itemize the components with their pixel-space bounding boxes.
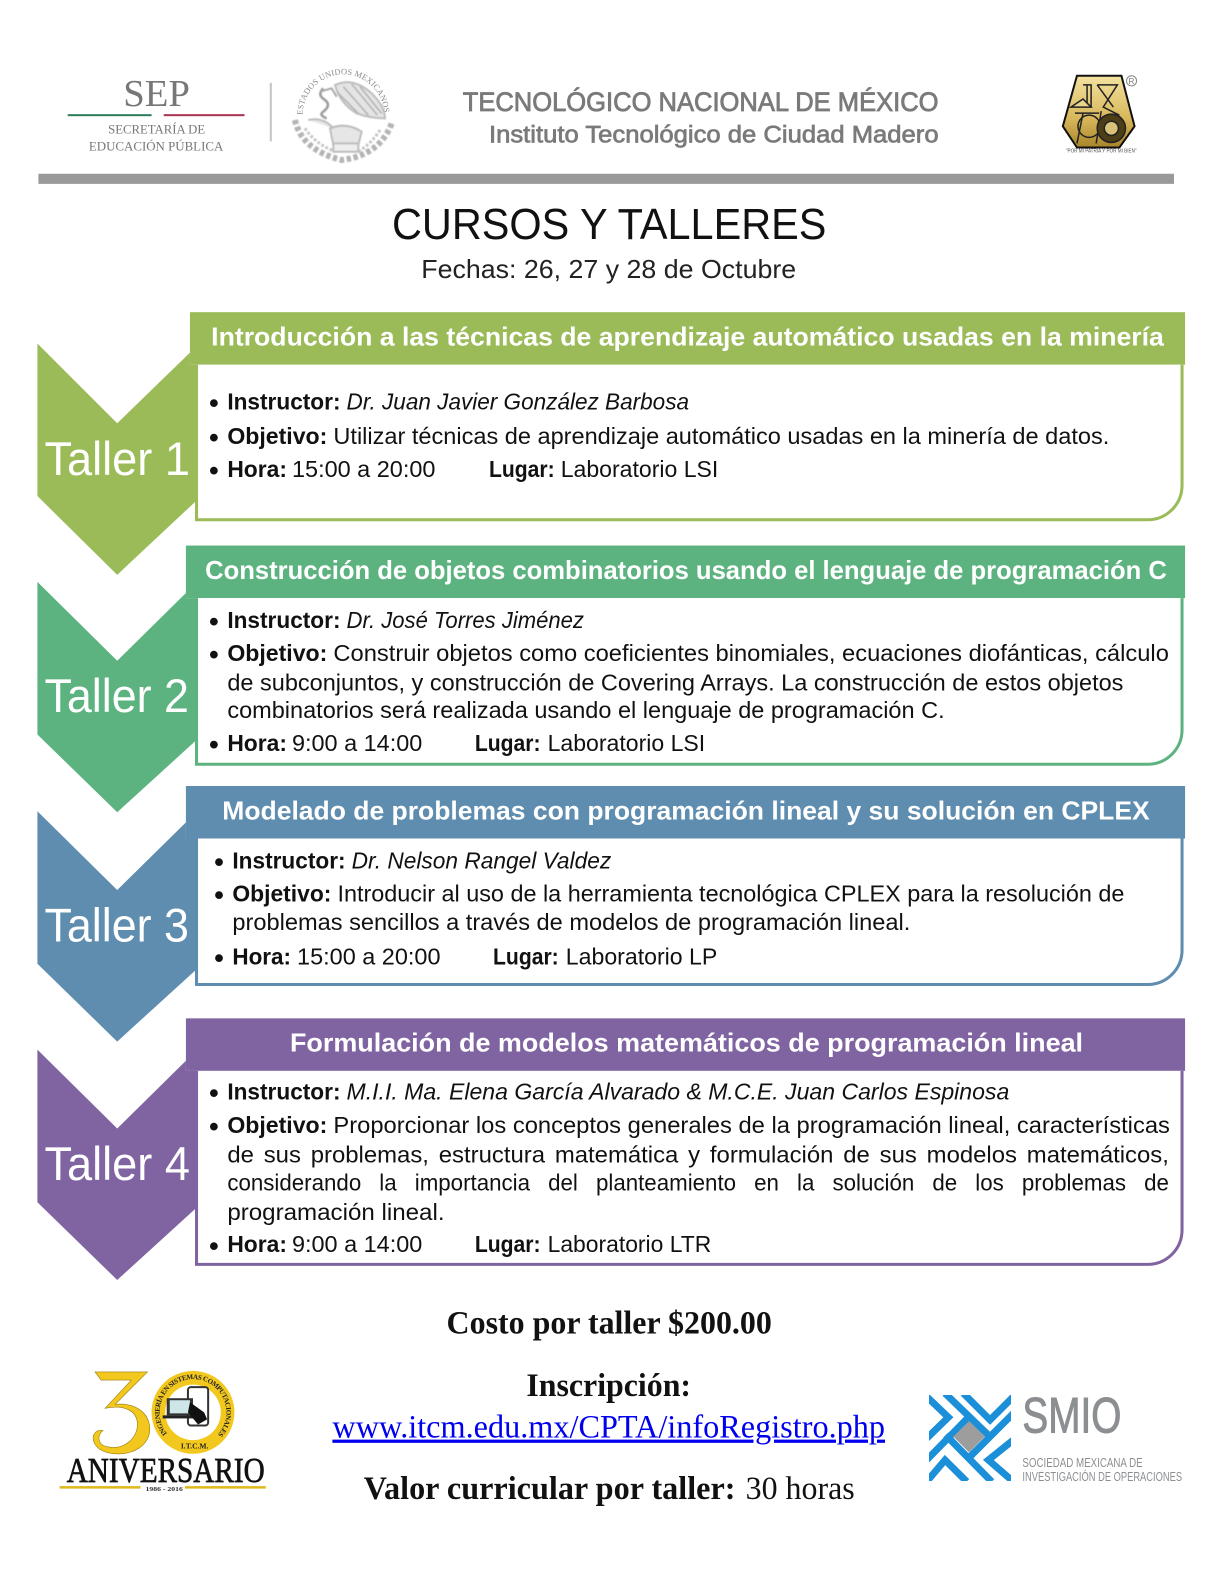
details box: Taller 4: M.I.I. Ma. Elena García Alvarado & M.C.E. Juan Carlos Espinosa — [347, 1079, 1009, 1105]
details box: Taller 4: considerando la importancia del planteamiento en la solución de los problemas de — [227, 1170, 1169, 1196]
curricular value: Valor curricular por taller: — [364, 1470, 736, 1506]
details box: Taller 2: Instructor: — [227, 607, 340, 633]
details box: Taller 1: Instructor: — [227, 389, 340, 415]
logo: national seal: ESTADOS UNIDOS MEXICANOS — [297, 68, 390, 115]
logo: 30 Aniversario — [60, 1370, 266, 1493]
wordmark ANIVERSARIO: ANIVERSARIO — [67, 1450, 265, 1490]
details box: Taller 4: • — [209, 1230, 219, 1261]
details box: Taller 3: Introducir al uso de la herramienta tecnológica CPLEX para la resolución de — [337, 881, 1124, 907]
details box: Taller 3: Dr. Nelson Rangel Valdez — [352, 847, 612, 873]
details box: Taller 1: Hora: — [227, 456, 287, 482]
registration link: www.itcm.edu.mx/CPTA/infoRegistro.php — [332, 1409, 885, 1445]
details box: Taller 3 — [197, 839, 1182, 985]
details box: Taller 4: programación lineal. — [227, 1199, 445, 1225]
anniversary seal ring: INGENIERÍA EN SISTEMAS COMPUTACIONALES — [154, 1374, 231, 1437]
details box: Taller 1: Dr. Juan Javier González Barbosa — [347, 389, 689, 415]
heading: Instituto Tecnológico de Ciudad Madero: Instituto Tecnológico de Ciudad Madero — [489, 122, 939, 148]
details box: Taller 3: problemas sencillos a través de modelos de programación lineal. — [232, 909, 910, 935]
chevron: Taller 1 — [37, 343, 197, 575]
details box: Taller 3: 15:00 a 20:00 — [297, 943, 441, 969]
details box: Taller 4: Hora: — [227, 1231, 287, 1257]
details box: Taller 1: Laboratorio LSI — [561, 456, 718, 482]
logo: national seal — [292, 68, 395, 164]
details box: Taller 4: Lugar: — [475, 1231, 541, 1257]
chevron: Taller 2: Taller 2 — [44, 670, 189, 723]
details box: Taller 2: Lugar: — [475, 730, 541, 756]
details box: Taller 1: 15:00 a 20:00 — [292, 456, 435, 482]
header bar: Taller 4 title — [186, 1018, 1185, 1071]
logo: ITCM hexagon crest: "POR MI PATRIA Y POR MI BIEN" — [1066, 149, 1137, 155]
details box: Taller 3: Hora: — [232, 943, 291, 969]
numeral 3 — [93, 1372, 150, 1454]
details box: Taller 3: • — [214, 942, 224, 973]
header bar: Taller 4 title: Formulación de modelos matemáticos de programación lineal — [290, 1028, 1083, 1058]
chevron: Taller 4: Taller 4 — [44, 1138, 190, 1191]
logo: SEP: SECRETARÍA DE — [108, 122, 205, 136]
details box: Taller 3: • — [214, 846, 224, 877]
details box: Taller 1: Objetivo: — [227, 423, 327, 449]
details box: Taller 1: • — [209, 454, 219, 485]
details box: Taller 2: • — [209, 729, 219, 760]
subtitle: dates: Fechas: 26, 27 y 28 de Octubre — [421, 254, 796, 284]
SMIO full name: SOCIEDAD MEXICANA DE — [1022, 1456, 1143, 1470]
header rule — [38, 174, 1174, 184]
details box: Taller 2: 9:00 a 14:00 — [292, 730, 422, 756]
cost line: Costo por taller $200.00 — [447, 1305, 772, 1341]
details box: Taller 1: • — [209, 422, 219, 453]
details box: Taller 2: Laboratorio LSI — [548, 730, 705, 756]
details box: Taller 3: Laboratorio LP — [566, 943, 717, 969]
logo: ITCM hexagon crest: R — [1128, 77, 1134, 86]
details box: Taller 4: • — [209, 1077, 219, 1108]
details box: Taller 2: Hora: — [227, 730, 287, 756]
details box: Taller 4: Laboratorio LTR — [548, 1231, 711, 1257]
header bar: Taller 3 title — [186, 786, 1185, 839]
heading: Tecnológico Nacional de México: TECNOLÓGICO NACIONAL DE MÉXICO — [463, 86, 939, 117]
panel: Taller 3 — [37, 786, 1185, 1042]
chevron: Taller 3 — [37, 811, 197, 1042]
divider between SEP logo and seal — [270, 83, 272, 141]
chevron: Taller 2 — [37, 582, 197, 812]
logo: SMIO — [929, 1395, 1182, 1481]
details box: Taller 2: combinatorios será realizada usando el lenguaje de programación C. — [227, 697, 945, 723]
details box: Taller 3: Objetivo: — [232, 881, 331, 907]
anniversary seal ring: I.T.C.M. — [181, 1442, 209, 1451]
details box: Taller 4: Objetivo: — [227, 1112, 327, 1138]
details box: Taller 4: de sus problemas, estructura matemática y formulación de sus modelos matemáticos, — [227, 1141, 1169, 1167]
details box: Taller 4: Instructor: — [227, 1079, 340, 1105]
panel: Taller 4 — [37, 1018, 1185, 1280]
logo: SEP: SEP — [123, 73, 190, 115]
curricular value: 30 horas — [746, 1470, 855, 1506]
header bar: Taller 2 title: Construcción de objetos combinatorios usando el lenguaje de programación C — [205, 555, 1167, 585]
details box: Taller 2: Dr. José Torres Jiménez — [347, 607, 585, 633]
details box: Taller 2: Objetivo: — [227, 640, 327, 666]
details box: Taller 3: • — [214, 879, 224, 910]
header bar: Taller 1 title — [190, 312, 1185, 365]
SMIO wordmark: SMIO — [1022, 1387, 1121, 1444]
logo: SEP — [68, 73, 245, 154]
chevron: Taller 3: Taller 3 — [44, 900, 189, 953]
details box: Taller 4: Proporcionar los conceptos generales de la programación lineal, características — [333, 1112, 1170, 1138]
details box: Taller 2: Construir objetos como coeficientes binomiales, ecuaciones diofánticas, cálculo — [333, 640, 1169, 666]
details box: Taller 2: • — [209, 639, 219, 670]
chevron: Taller 4 — [37, 1050, 197, 1280]
details box: Taller 3: Instructor: — [232, 847, 346, 873]
logo: SEP: EDUCACIÓN PÚBLICA — [89, 140, 224, 154]
header: logos band — [68, 68, 1138, 164]
panel: Taller 2 — [37, 546, 1185, 812]
details box: Taller 4: • — [209, 1111, 219, 1142]
details box: Taller 2 — [197, 598, 1182, 764]
registration heading: Inscripción: — [526, 1367, 691, 1403]
details box: Taller 1: Utilizar técnicas de aprendizaje automático usadas en la minería de datos. — [333, 423, 1109, 449]
details box: Taller 4: 9:00 a 14:00 — [292, 1231, 422, 1257]
chevron: Taller 1: Taller 1 — [44, 433, 190, 486]
details box: Taller 2: de subconjuntos, y construcción de Covering Arrays. La construcción de estos objetos — [227, 670, 1123, 696]
panel: Taller 1 — [37, 312, 1185, 575]
header bar: Taller 1 title: Introducción a las técnicas de aprendizaje automático usadas en la minería — [211, 322, 1164, 352]
details box: Taller 1: Lugar: — [489, 456, 555, 482]
details box: Taller 4 — [197, 1071, 1182, 1264]
header bar: Taller 3 title: Modelado de problemas con programación lineal y su solución en CPLEX — [222, 795, 1150, 825]
details box: Taller 1: • — [209, 387, 219, 418]
details box: Taller 3: Lugar: — [493, 943, 559, 969]
details box: Taller 2: • — [209, 605, 219, 636]
SMIO full name — [1022, 1456, 1182, 1484]
title: CURSOS Y TALLERES — [392, 201, 826, 249]
logo: ITCM hexagon crest — [1063, 76, 1137, 155]
header bar: Taller 2 title — [186, 546, 1185, 598]
details box: Taller 1 — [197, 365, 1182, 520]
underline with years: 1986 - 2016 — [146, 1486, 184, 1493]
SMIO symbol — [927, 1393, 1013, 1482]
